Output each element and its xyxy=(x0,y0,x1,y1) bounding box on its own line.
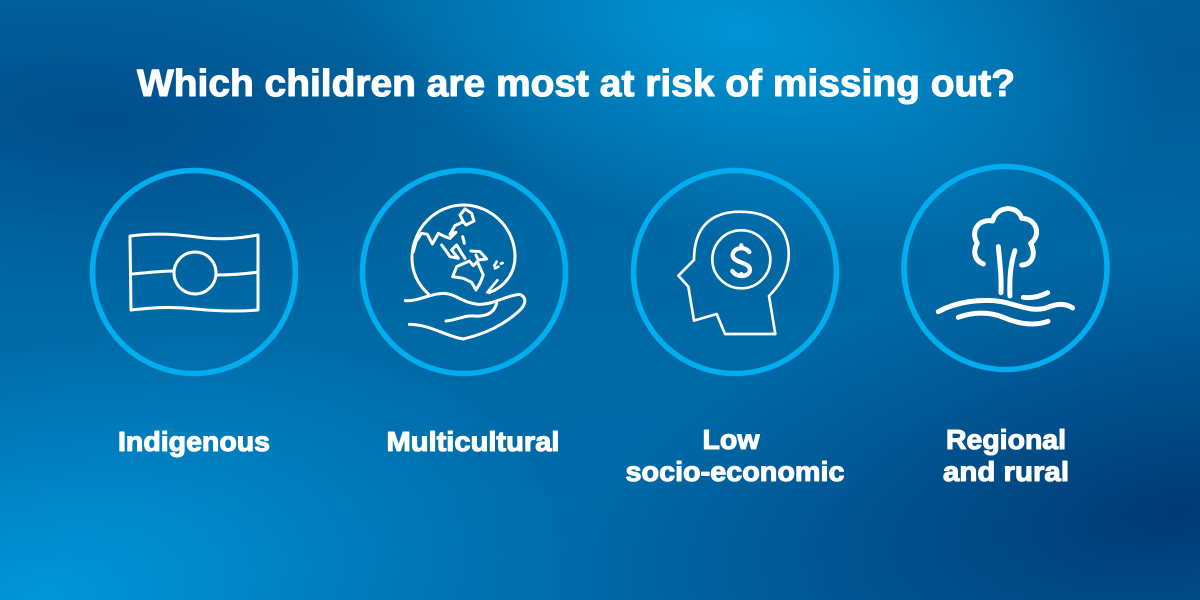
icon: tree and river xyxy=(938,209,1073,324)
panel: Indigenous xyxy=(92,170,296,457)
ring: Multicultural xyxy=(362,170,566,374)
panel: Low socio-economic xyxy=(626,170,844,487)
label: Indigenous: Indigenous xyxy=(118,426,270,457)
label: Multicultural: Multicultural xyxy=(386,426,560,457)
ring: Indigenous xyxy=(92,170,296,374)
icon: globe in hand xyxy=(405,205,525,339)
ring: Regional and rural xyxy=(904,166,1107,370)
label: Low socio-economic: Low xyxy=(702,424,760,455)
label: Regional and rural xyxy=(943,424,1069,487)
icon: head with dollar xyxy=(678,212,789,334)
label: Low socio-economic xyxy=(626,424,844,487)
label: Regional and rural: Regional xyxy=(946,424,1066,455)
panel: Multicultural xyxy=(362,170,566,457)
panel: Regional and rural xyxy=(904,166,1107,487)
ring: Low socio-economic xyxy=(634,170,836,374)
title: Which children are most at risk of missing out? xyxy=(137,63,1015,105)
label: Regional and rural: and rural xyxy=(943,456,1069,487)
icon: flag xyxy=(130,234,258,311)
label: Low socio-economic: socio-economic xyxy=(626,456,844,487)
